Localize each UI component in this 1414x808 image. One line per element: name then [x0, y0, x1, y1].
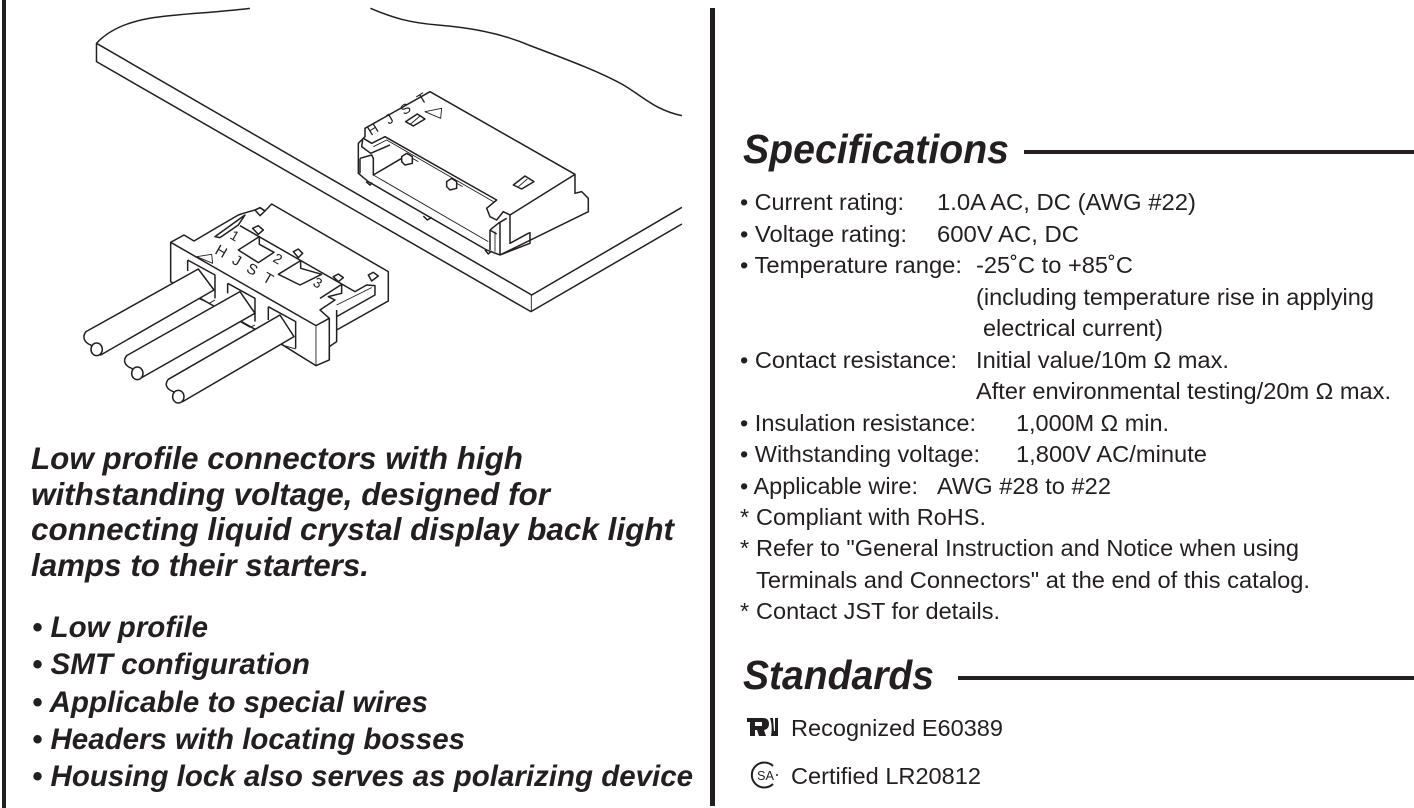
specifications list: -25˚C to +85˚C [976, 252, 1133, 278]
specifications list: • Voltage rating: [740, 221, 907, 247]
feature list: • Applicable to special wires [32, 686, 428, 719]
specifications list: After environmental testing/20m Ω max. [976, 378, 1391, 404]
feature list: • Low profile [32, 611, 208, 644]
pin number 2: 2 [270, 250, 285, 268]
heading: Specifications: Specifications [743, 126, 1009, 172]
heading: Standards [743, 652, 1414, 698]
specifications list: Initial value/10m Ω max. [976, 347, 1229, 373]
specifications list: * [740, 598, 749, 624]
heading: Specifications [743, 126, 1414, 172]
wire 2 [125, 292, 255, 380]
icon: CSA mark [752, 762, 778, 787]
specifications list: • Contact resistance: [740, 347, 957, 373]
specifications list: • Applicable wire: [740, 473, 918, 499]
header marking HJST: H J S T [364, 87, 433, 139]
window openings [188, 260, 296, 349]
specifications list: • Withstanding voltage: [740, 441, 980, 467]
specifications list: 1,800V AC/minute [1016, 441, 1207, 467]
standard: UL recognized: Recognized E60389 [791, 715, 1003, 741]
lead description: Low profile connectors with high [31, 440, 523, 476]
wire housing connector [84, 204, 388, 403]
feature list: • Housing lock also serves as polarizing device [32, 760, 693, 793]
specifications list: • Temperature range: [740, 252, 962, 278]
specifications list: Refer to "General Instruction and Notice when using [756, 535, 1299, 561]
icon: CSA mark: SA [757, 768, 774, 783]
specifications list: Terminals and Connectors" at the end of this catalog. [756, 567, 1310, 593]
specifications list: 1.0A AC, DC (AWG #22) [937, 189, 1196, 215]
standard: CSA certified: Certified LR20812 [791, 763, 981, 789]
specifications list: AWG #28 to #22 [937, 473, 1111, 499]
specifications list: (including temperature rise in applying [976, 284, 1374, 310]
specifications list: 600V AC, DC [937, 221, 1079, 247]
specifications list [740, 189, 1391, 624]
housing marking HJST: H J S T [212, 242, 278, 290]
specifications list: * [740, 535, 749, 561]
specifications list: 1,000M Ω min. [1016, 410, 1169, 436]
feature list: • SMT configuration [32, 648, 310, 681]
circuit board [96, 8, 682, 312]
lead description [31, 440, 676, 583]
lead description: withstanding voltage, designed for [31, 476, 552, 512]
specifications list: * [740, 504, 749, 530]
specifications list: Contact JST for details. [756, 598, 1000, 624]
feature list: • Headers with locating bosses [32, 723, 465, 756]
feature list [32, 611, 693, 793]
specifications list: • Current rating: [740, 189, 904, 215]
header connector on board [358, 92, 588, 255]
lead description: lamps to their starters. [31, 547, 369, 583]
lead description: connecting liquid crystal display back light [31, 511, 676, 547]
pin number 3: 3 [310, 274, 325, 292]
heading: Standards: Standards [743, 652, 934, 698]
specifications list: Compliant with RoHS. [756, 504, 986, 530]
wire 3 [166, 315, 294, 403]
wire 1 [84, 269, 214, 356]
icon: UR mark [747, 718, 778, 736]
specifications list: • Insulation resistance: [740, 410, 976, 436]
illustration: board with header and wire housing [84, 8, 682, 403]
pin number 1: 1 [228, 227, 242, 245]
specifications list: electrical current) [983, 315, 1163, 341]
